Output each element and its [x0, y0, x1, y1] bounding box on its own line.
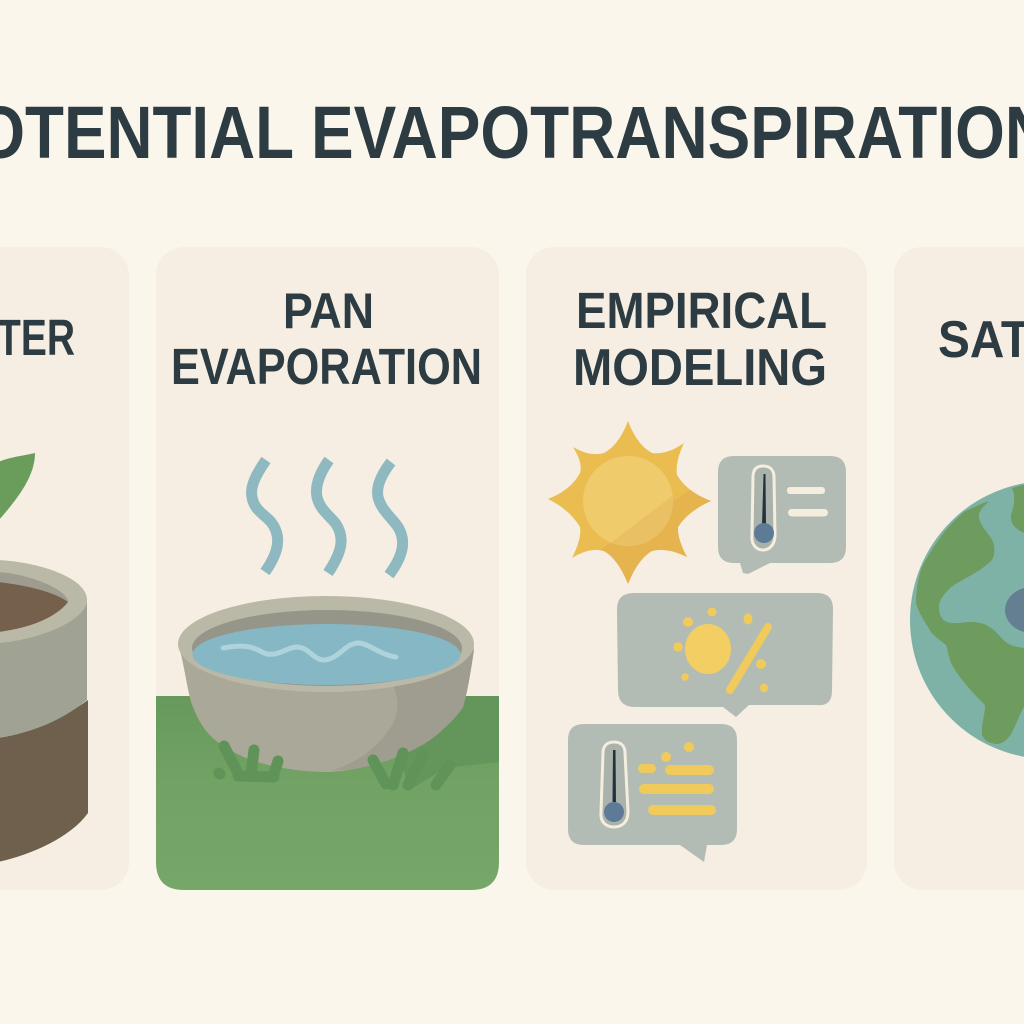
title: [0, 91, 1024, 174]
heading: pan evaporation: PAN: [283, 283, 374, 339]
icon: sun: [548, 421, 711, 584]
panel background: pan evaporation: [156, 247, 499, 890]
panel background: lysimeter: [0, 247, 129, 890]
icon: globe: [910, 481, 1024, 759]
heading: empirical modeling: EMPIRICAL: [576, 282, 827, 339]
callout: sun and percent: [617, 593, 833, 717]
icon: grass tufts: [219, 746, 450, 785]
panel: empirical modeling: [526, 247, 867, 890]
panel background: satellite: [894, 247, 1024, 890]
panel background: empirical modeling: [526, 247, 867, 890]
heading: empirical modeling: MODELING: [573, 339, 827, 397]
icon: evaporation pan: [178, 596, 474, 772]
ground: shaded grass: [400, 696, 499, 790]
panel: pan evaporation: [156, 247, 499, 890]
icon: vapor waves: [252, 460, 403, 575]
callout: thermometer and lines: [718, 456, 846, 574]
icon: plant leaf: [0, 453, 35, 521]
heading: empirical modeling: [573, 282, 827, 397]
heading: pan evaporation: [171, 283, 482, 395]
heading: pan evaporation: EVAPORATION: [171, 338, 482, 395]
icon: soil container: [0, 560, 88, 862]
panel: satellite: [894, 247, 1024, 890]
callout: thermometer and yellow lines: [568, 724, 737, 862]
panel: lysimeter: [0, 247, 129, 890]
ground: grass: [156, 696, 499, 890]
heading: lysimeter: TER: [0, 309, 75, 366]
